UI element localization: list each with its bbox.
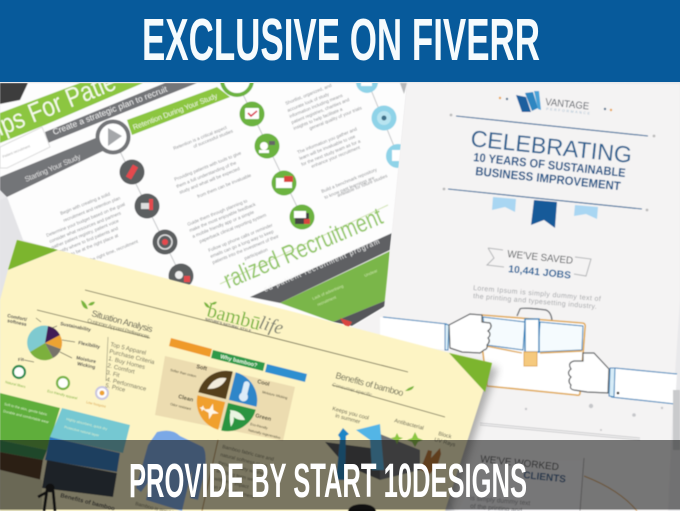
text: step descriptions middle column: emails can go a long way to keep (210, 229, 275, 259)
grey program band and green footer: Unclear (363, 268, 379, 278)
text: step descriptions left column: recruitment and retention plan (63, 195, 121, 223)
text: step descriptions left column (46, 191, 139, 263)
text: step descriptions middle column: participation (244, 247, 269, 261)
grey program band and green footer: Lack of advertising (311, 283, 344, 301)
infographic blocks (0, 393, 130, 511)
icons: small badges (5, 366, 108, 409)
icon: blue sweater (136, 431, 206, 511)
stat: jobs saved: WE'VE SAVED (507, 249, 573, 267)
text: step descriptions right column: enhance your recruitment (311, 145, 361, 169)
text: purchase criteria list: Purchase Criteria (109, 349, 156, 366)
text: bamboo details: and long term wear (216, 468, 259, 484)
labels: benefits: Keeps you cool (331, 406, 369, 422)
labels: benefits: Antibacterial (393, 418, 424, 432)
icons: green step circles (222, 65, 314, 230)
logo: bambu life (204, 300, 286, 339)
grey strategy band (45, 83, 197, 143)
heading: benefits of bamboo: Benefits of bamboo (334, 370, 405, 398)
labels: wheel quadrants: Softer than cotton (170, 368, 197, 378)
text: bamboo details: with less impact (214, 476, 250, 491)
text: step descriptions right column: learn will be invaluable to use (299, 134, 356, 161)
text: lorem ipsum: the printing and typesetting industry. (473, 293, 597, 311)
labels: wheel quadrants: Soft (196, 364, 208, 373)
pie chart: preferences: Sustainability (60, 321, 92, 334)
infographic blocks: Protective natural layer (64, 425, 100, 438)
text: step descriptions right column: Shortlist, organized, and (285, 83, 333, 106)
banner: why bamboo (169, 338, 307, 382)
heading: celebrating: CELEBRATING (469, 125, 633, 168)
icon: dark corner graphic (0, 83, 28, 104)
pie chart: preferences: Comfort/ (7, 313, 28, 323)
text: bamboo details: on the environment (212, 484, 255, 500)
text: step descriptions right column: insights to help facilitate a (293, 106, 344, 131)
timeline connectors (120, 91, 394, 266)
text: bamboo details: Bamboo fabric care and (222, 444, 275, 463)
grey program band and green footer (250, 233, 392, 330)
pie chart: preferences (7, 313, 101, 371)
footer overlay (0, 440, 680, 510)
icon: briefcase (482, 308, 585, 395)
text: bamboo details: natural softness stays (220, 452, 268, 470)
panel: patient recruitment sheet (0, 83, 406, 327)
panel: benefits hexagon (155, 356, 295, 441)
pie chart: preferences: softness (7, 318, 27, 328)
labels: wheel quadrants: Cool (257, 379, 270, 388)
pie chart: preferences: Moisture (76, 355, 97, 365)
labels: wheel quadrants: Eco-friendly (250, 422, 268, 430)
logo: bambu life: life (257, 313, 286, 339)
heading: benefits of bamboo: Consumer specific (331, 382, 373, 399)
grey strategy band: Create a strategic plan to recruit (51, 84, 169, 137)
text: step descriptions right column: for the next study team as for a (301, 138, 361, 167)
text: step descriptions left column: design to be at the right place at (57, 233, 120, 262)
labels: benefits: UV Rays (433, 437, 456, 449)
text: purchase criteria list: 5. Price (105, 383, 126, 394)
text: step descriptions middle column: Providing patients with tools to give (174, 150, 242, 182)
labels: benefits: Block (437, 431, 452, 440)
text: bamboo details (135, 440, 275, 511)
grey program band and green footer: ed patient recruitment program (263, 238, 381, 294)
labels: benefits: in summer (334, 413, 361, 426)
subheading: 10 years: 10 YEARS OF SUSTAINABLE (473, 150, 626, 180)
lower panel: clients: is simply dummy text (470, 495, 531, 507)
text: step descriptions right column: patient registries, charities and (291, 97, 351, 125)
icon: dark dome (348, 504, 376, 511)
shadow under bamboo sheet (440, 358, 498, 511)
icons: small badges: Natural fibers (5, 380, 26, 389)
stat: jobs saved (487, 248, 591, 282)
text: step descriptions right column: to know past learnings are (324, 175, 376, 200)
icon: green corner triangle right (449, 353, 492, 392)
icon: green corner triangle left (8, 240, 58, 270)
callout box (0, 127, 50, 168)
text: purchase criteria list: 2. Comfort (107, 363, 135, 376)
pie chart: preferences: Fit (18, 357, 24, 363)
chart: four quadrant wheel (191, 365, 263, 437)
text: step descriptions middle column: of successful studies (193, 128, 234, 149)
grey program band and green footer: recruitment (316, 294, 338, 307)
heading: situation analysis: Situation Analysis (90, 308, 154, 334)
header rules (37, 290, 445, 417)
text: step descriptions middle column: a mobile friendly app or a simple (192, 209, 255, 239)
text: step descriptions right column: available for future studies (337, 173, 389, 198)
icons: small badges: Eco friendly apparel (47, 389, 78, 401)
heading: situation analysis (81, 300, 154, 341)
icon: right arm and hand (568, 353, 677, 404)
infographic blocks: Highly absorbent, quick dry (66, 417, 108, 431)
infographic blocks: Soft to the skin, gentle fabric (4, 402, 48, 417)
icon: play badge (98, 122, 128, 152)
text: step descriptions left column: identify where to find patients and (54, 225, 119, 256)
logo: bambu life: NATURE'S NATURAL STYLE (205, 317, 252, 333)
text: step descriptions middle column: Retention is a critical aspect (173, 125, 228, 151)
text: step descriptions right column: Build a benchmark repository (321, 167, 378, 194)
text: purchase criteria list: 3. Fit (106, 370, 120, 379)
labels: benefits (331, 406, 456, 449)
lower panel: clients: WE'VE WORKED (480, 454, 559, 473)
labels: wheel quadrants: Naturally regenerative (248, 428, 281, 440)
heading: centralized recruitment (219, 202, 388, 295)
header band (0, 0, 680, 82)
labels: wheel quadrants (170, 364, 288, 440)
text: step descriptions left column: gather patient registry, patient voice (51, 218, 120, 250)
text: step descriptions middle column: make the most enjoyable feedback (189, 201, 257, 233)
infographic blocks: Durable and comfortable wear (3, 409, 50, 425)
text: step descriptions right column: general quality of your trials (309, 105, 363, 131)
heading: centralized recruitment: ralized Recruitment (219, 202, 387, 295)
text: purchase criteria list (105, 337, 156, 394)
text: purchase criteria list: 1. Buy Homes (108, 356, 146, 371)
title rules (443, 114, 655, 211)
subheading: business improvement: BUSINESS IMPROVEMENT (475, 164, 622, 193)
panel: bambu life sheet (0, 240, 492, 511)
text: step descriptions middle column: Guide them through planning to (187, 198, 248, 227)
panel: vantage performance sheet (352, 83, 680, 511)
text: step descriptions middle column: them a full understanding of the (176, 160, 237, 189)
icon: left arm and hand (380, 314, 491, 353)
text: step descriptions middle column (173, 125, 280, 265)
text: step descriptions middle column: paperback clinical reporting system (199, 212, 267, 244)
text: step descriptions middle column: from them can be invaluable (197, 173, 252, 199)
band: retention during your study: Retention During Your Study (131, 91, 219, 132)
labels: wheel quadrants: Odor resistant (170, 402, 191, 411)
text: step descriptions left column: consider what resources and partners (49, 210, 122, 244)
band: starting your study: Starting Your Study (23, 152, 82, 184)
text: step descriptions right column: The information you gather and (297, 126, 358, 155)
text: purchase criteria list: 4. Performance (106, 377, 147, 393)
text: purchase criteria list: Top 5 Apparel (110, 342, 147, 357)
text: lorem ipsum: Lorem Ipsum is simply dummy text of (473, 285, 601, 303)
decorative stars (525, 404, 663, 431)
section rule (480, 423, 640, 440)
text: step descriptions middle column: study and what will be expected (179, 166, 241, 195)
labels: wheel quadrants: Green (255, 413, 272, 423)
text: step descriptions left column: Begin with creating a solid (60, 191, 111, 216)
text: step descriptions right column: information including means (289, 93, 344, 119)
stat: jobs saved: 10,441 JOBS (508, 264, 572, 282)
icons: small badges: Low footprint (86, 400, 106, 409)
green title band (0, 83, 143, 144)
pie chart: preferences: Flexibility (78, 340, 101, 351)
icon: vantage logo: PERFORMANCE (546, 107, 591, 116)
icon: vantage logo (499, 91, 612, 116)
text: step descriptions right column (285, 83, 389, 200)
text: step descriptions middle column: patients into the investment of their (212, 233, 280, 265)
lower panel: clients: CLIENTS (523, 470, 567, 485)
lower panel: clients (458, 454, 637, 511)
heading: situation analysis: Customer Apparel Preferences (86, 318, 150, 341)
band: starting your study (0, 135, 105, 197)
banner: why bamboo: Why bamboo? (220, 354, 258, 369)
labels: wheel quadrants: Moisture Wicking (262, 390, 288, 400)
logo: bambu life: bambū (205, 300, 263, 335)
icons: blue step circles (356, 83, 401, 168)
callout box: Patient recruitment (2, 144, 31, 159)
icon: fabric with arrows (325, 424, 441, 480)
text: bamboo details: through many washes (218, 460, 267, 478)
icon: vantage logo: VANTAGE (545, 97, 590, 113)
labels: wheel quadrants: Clean (178, 394, 194, 404)
pie chart: preferences: Wicking (77, 361, 96, 371)
text: step descriptions left column: the right time, recruitment (89, 239, 139, 263)
text: step descriptions middle column: Follow up phone calls or reminder (208, 222, 274, 253)
text: step descriptions left column: Determine your budget based on the goal (46, 202, 126, 238)
icon: ribbons (492, 197, 598, 228)
icons: grey step circles (120, 160, 194, 288)
text: step descriptions right column: accurate look of study (287, 91, 330, 113)
